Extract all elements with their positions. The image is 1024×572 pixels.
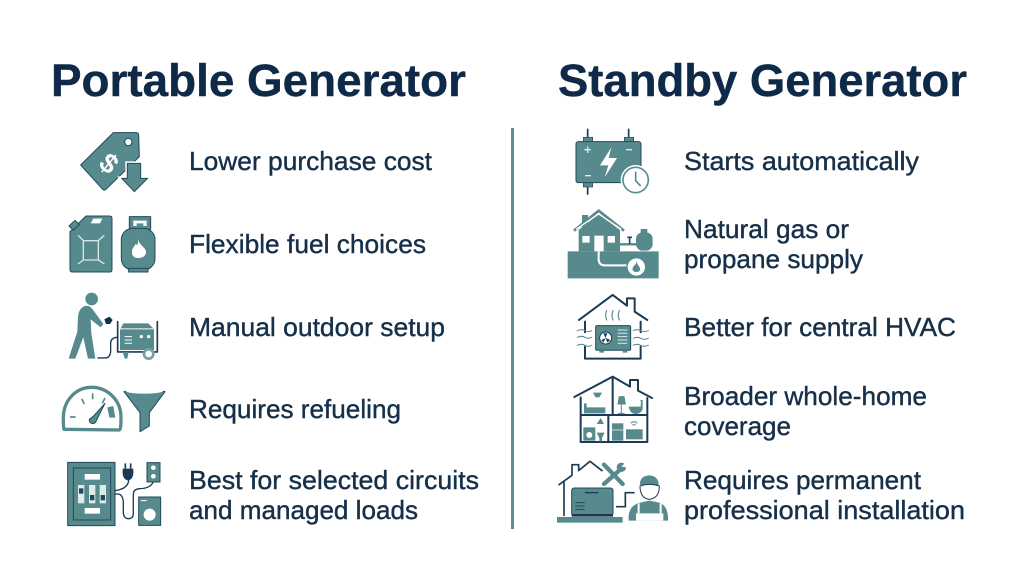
text: Best for selected circuits and managed loads: Best for selected circuits [189, 465, 479, 495]
text: Better for central HVAC: Better for central HVAC [684, 312, 956, 342]
icon: person connecting portable generator [69, 293, 157, 359]
heading: Standby Generator: Standby Generator [558, 55, 967, 106]
icon: generator installation with technician [557, 461, 668, 523]
icon: house with HVAC unit [577, 295, 648, 359]
text: Best for selected circuits and managed loads [189, 465, 479, 525]
icon: price tag with down arrow [81, 133, 148, 192]
icon: price tag with down arrow: $ [93, 146, 125, 180]
text: Starts automatically: Starts automatically [684, 146, 919, 176]
text: Manual outdoor setup: Manual outdoor setup [189, 312, 445, 342]
column divider [511, 128, 514, 529]
text: Requires permanent professional installation: professional installation [684, 495, 965, 525]
icon: house with gas line and propane tank [568, 211, 659, 278]
icon: fuel gauge and funnel [63, 387, 165, 432]
icon: house cross-section with rooms [574, 377, 652, 442]
panel: portable generator list [63, 133, 479, 526]
text: Broader whole-home coverage: Broader whole-home [684, 381, 927, 411]
text: Best for selected circuits and managed loads: and managed loads [189, 495, 418, 525]
text: Natural gas or propane supply: Natural gas or [684, 214, 849, 244]
heading: Portable Generator: Portable Generator [51, 55, 466, 106]
text: Requires permanent professional installation: Requires permanent [684, 465, 922, 495]
icon: battery with lightning bolt and clock [576, 129, 651, 195]
text: Broader whole-home coverage: coverage [684, 411, 791, 441]
icon: breaker panel with plug and washer [68, 462, 161, 526]
text: Broader whole-home coverage [684, 381, 927, 441]
text: Requires refueling: Requires refueling [189, 394, 401, 424]
text: Lower purchase cost: Lower purchase cost [189, 146, 433, 176]
text: Flexible fuel choices: Flexible fuel choices [189, 229, 426, 259]
icon: fuel can and propane cylinder [69, 216, 155, 272]
text: Natural gas or propane supply [684, 214, 863, 274]
text: Requires permanent professional installation [684, 465, 965, 525]
text: Natural gas or propane supply: propane supply [684, 244, 863, 274]
panel: standby generator list [557, 129, 965, 525]
